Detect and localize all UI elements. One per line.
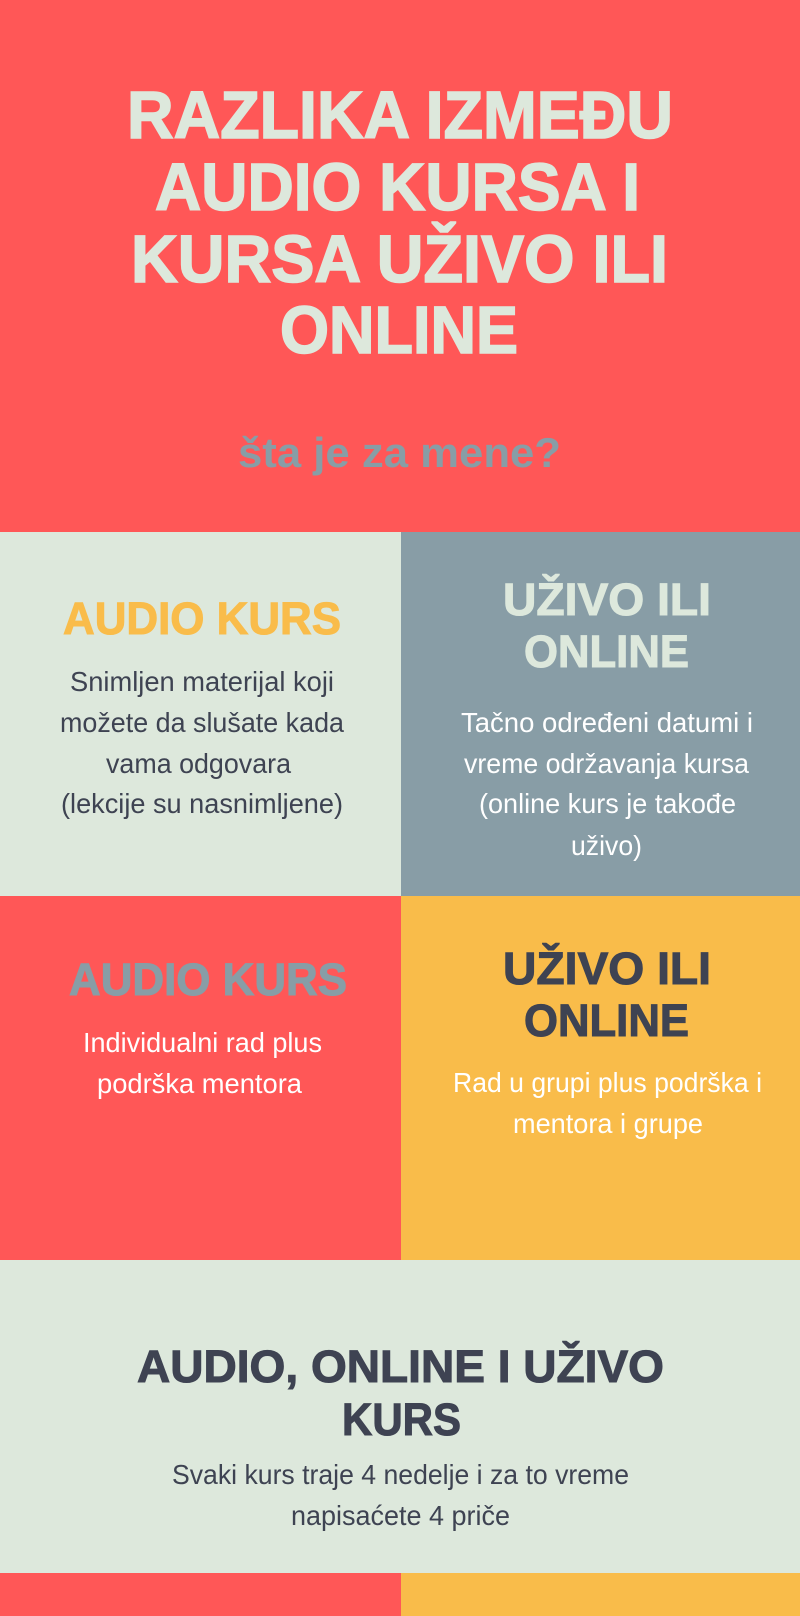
text: uživo ili online work format [453,1067,762,1139]
title: KURSA UŽIVO ILI [131,222,668,297]
heading: uživo ili online [503,574,711,677]
text: audio kurs description: vama odgovara [106,748,292,779]
heading: audio, online i uživo kurs: KURS [342,1394,461,1445]
heading: uživo ili online: ONLINE [524,626,689,677]
text: uživo ili online description [461,707,753,861]
text: uživo ili online work format: mentora i grupe [513,1108,703,1139]
heading: audio, online i uživo kurs [137,1341,664,1445]
text: uživo ili online work format: Rad u grupi plus podrška i [453,1067,762,1098]
text: audio kurs work format: Individualni rad plus [83,1027,322,1058]
panel: uživo ili online description [401,532,800,896]
title: AUDIO KURSA I [155,150,640,225]
title: ONLINE [280,293,518,368]
text: uživo ili online description: (online kurs je takođe [479,788,736,819]
text: audio kurs description: možete da slušate kada [60,707,345,738]
text: audio kurs work format: podrška mentora [97,1068,303,1099]
text: audio kurs description [60,666,345,819]
heading: uživo ili online [503,943,711,1046]
title: RAZLIKA IZMEĐU [127,78,673,153]
text: course duration: Svaki kurs traje 4 nedelje i za to vreme [172,1459,629,1490]
panel: uživo ili online work format [401,896,800,1260]
heading: uživo ili online: UŽIVO ILI [503,943,711,994]
heading: uživo ili online: UŽIVO ILI [503,574,711,625]
heading: audio kurs: AUDIO KURS [69,954,347,1005]
title [127,78,673,368]
panel: audio kurs work format [0,896,401,1260]
text: course duration [172,1459,629,1531]
panel: bottom right yellow strip [401,1573,800,1616]
text: audio kurs description: (lekcije su nasnimljene) [61,788,343,819]
text: uživo ili online description: vreme održavanja kursa [464,748,750,779]
text: uživo ili online description: uživo) [571,830,642,861]
heading: audio, online i uživo kurs: AUDIO, ONLINE I UŽIVO [137,1341,664,1392]
panel: bottom left red strip [0,1573,401,1616]
subtitle: šta je za mene? [238,429,561,476]
heading: audio kurs: AUDIO KURS [63,593,341,644]
panel: course duration [0,1260,800,1573]
text: course duration: napisaćete 4 priče [291,1500,510,1531]
text: audio kurs work format [83,1027,322,1099]
panel: audio kurs description [0,532,401,896]
panel: title header [0,0,800,532]
heading: uživo ili online: ONLINE [524,995,689,1046]
text: uživo ili online description: Tačno određeni datumi i [461,707,753,738]
text: audio kurs description: Snimljen materijal koji [70,666,334,697]
